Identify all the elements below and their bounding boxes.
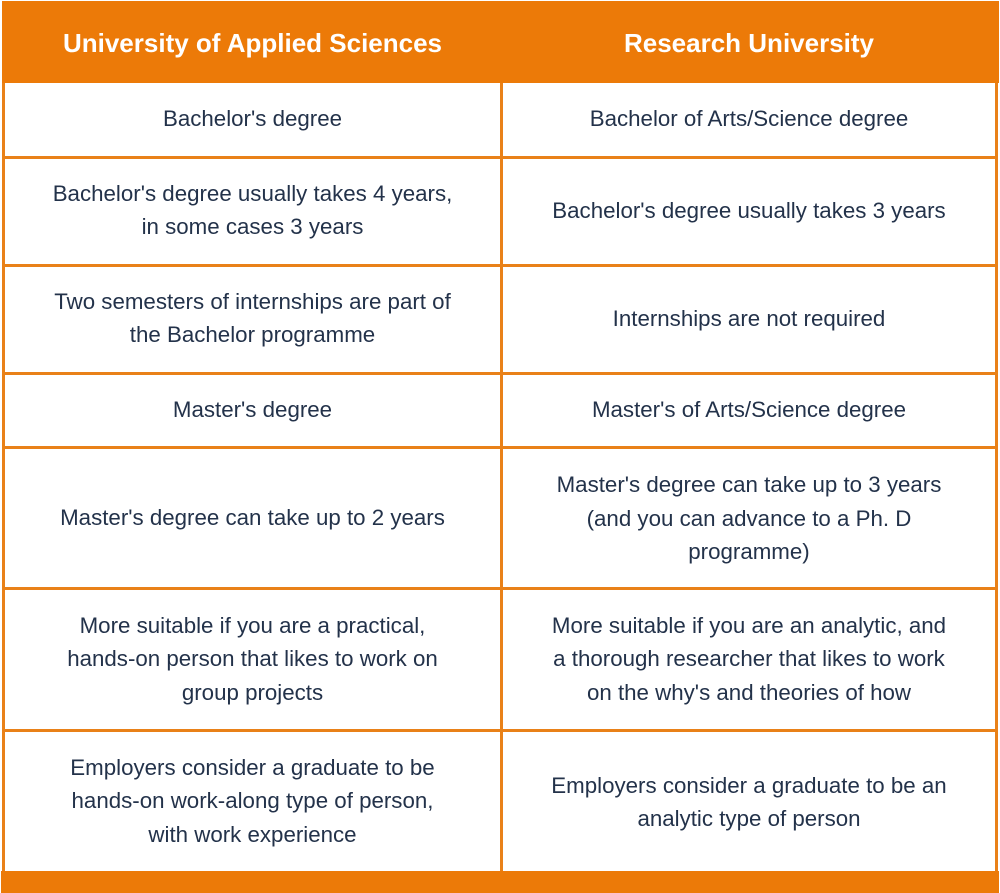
- row 1 right: Bachelor of Arts/Science degree: [590, 106, 908, 131]
- row 3 left: Two semesters of internships are part of: [54, 288, 451, 314]
- row 7 right: [551, 772, 947, 831]
- row 1 left: Bachelor's degree: [163, 106, 342, 131]
- row 6 left: group projects: [182, 680, 323, 705]
- row 7 right: analytic type of person: [637, 806, 861, 831]
- row 5 right: programme): [688, 539, 810, 564]
- row 5 right: (and you can advance to a Ph. D: [587, 506, 911, 531]
- row 2 left: in some cases 3 years: [142, 214, 363, 239]
- row 7 right: Employers consider a graduate to be an: [551, 772, 947, 798]
- heading: Research University: Research University: [624, 28, 874, 58]
- row 6 left: More suitable if you are a practical,: [80, 613, 425, 638]
- row 7 left: hands-on work-along type of person,: [72, 788, 433, 813]
- row 2 right: Bachelor's degree usually takes 3 years: [552, 198, 946, 223]
- row 6 right: a thorough researcher that likes to work: [553, 646, 945, 671]
- row 3 right: Internships are not required: [613, 306, 885, 331]
- row 6 right: on the why's and theories of how: [587, 680, 911, 705]
- row 6 left: [67, 613, 438, 705]
- row 7 left: with work experience: [148, 822, 357, 847]
- row 4 left: Master's degree: [173, 397, 332, 422]
- heading: University of Applied Sciences: University of Applied Sciences: [63, 28, 442, 58]
- row 5 left: Master's degree can take up to 2 years: [60, 505, 445, 530]
- row 2 left: [53, 180, 452, 239]
- row 6 right: More suitable if you are an analytic, and: [552, 613, 946, 638]
- row 7 left: Employers consider a graduate to be: [70, 755, 435, 780]
- header band: [2, 1, 999, 83]
- row 6 left: hands-on person that likes to work on: [67, 646, 438, 671]
- row 5 right: [557, 472, 941, 564]
- footer band: [1, 871, 999, 893]
- row 6 right: [552, 613, 946, 705]
- row 5 right: Master's degree can take up to 3 years: [557, 472, 941, 497]
- row 4 right: Master's of Arts/Science degree: [592, 397, 906, 422]
- row 3 left: [54, 288, 451, 347]
- row 3 left: the Bachelor programme: [130, 322, 375, 347]
- row 7 left: [70, 755, 435, 847]
- row 2 left: Bachelor's degree usually takes 4 years,: [53, 180, 452, 206]
